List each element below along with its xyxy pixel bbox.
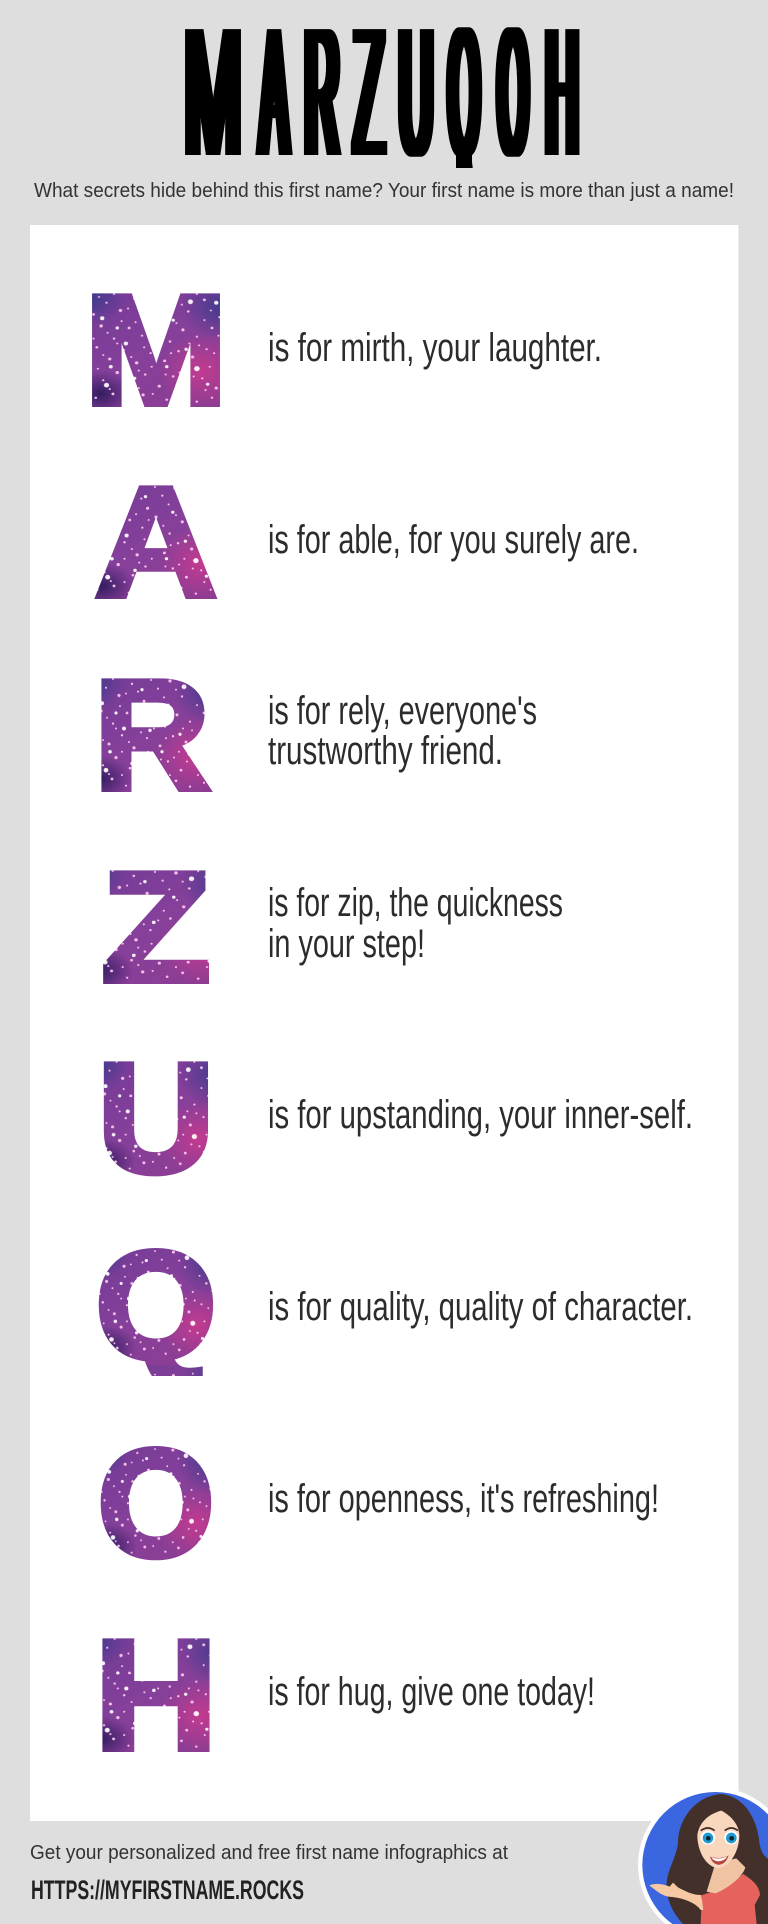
row A xyxy=(95,456,639,629)
panel: letters xyxy=(30,225,738,1821)
row Q xyxy=(98,1248,690,1376)
row M: is for mirth, your laughter. xyxy=(268,326,602,370)
row R: R xyxy=(94,649,210,822)
row R xyxy=(94,649,537,822)
row U xyxy=(98,1031,693,1205)
row U: U xyxy=(98,1031,214,1205)
title xyxy=(185,27,580,168)
row M: M xyxy=(84,263,228,437)
row Q: Q xyxy=(96,1220,216,1390)
row Z: is for zip, the quickness xyxy=(268,881,563,925)
row O xyxy=(98,1417,659,1588)
row H xyxy=(95,1609,595,1782)
row Z: Z xyxy=(102,841,210,1014)
footer url: HTTPS://MYFIRSTNAME.ROCKS xyxy=(31,1875,304,1905)
icon: avatar xyxy=(638,1788,768,1924)
row R: trustworthy friend. xyxy=(268,729,503,773)
footer text: Get your personalized and free first name infographics at xyxy=(30,1842,508,1864)
row Z xyxy=(102,841,563,1014)
subtitle: What secrets hide behind this first name? Your first name is more than just a name! xyxy=(34,180,734,202)
row H: H xyxy=(95,1609,217,1782)
row R: is for rely, everyone's xyxy=(268,689,537,733)
row A: A xyxy=(95,456,217,629)
row H: is for hug, give one today! xyxy=(268,1670,595,1714)
row M xyxy=(84,263,602,437)
row Z: in your step! xyxy=(268,922,425,966)
row O: O xyxy=(98,1417,214,1588)
